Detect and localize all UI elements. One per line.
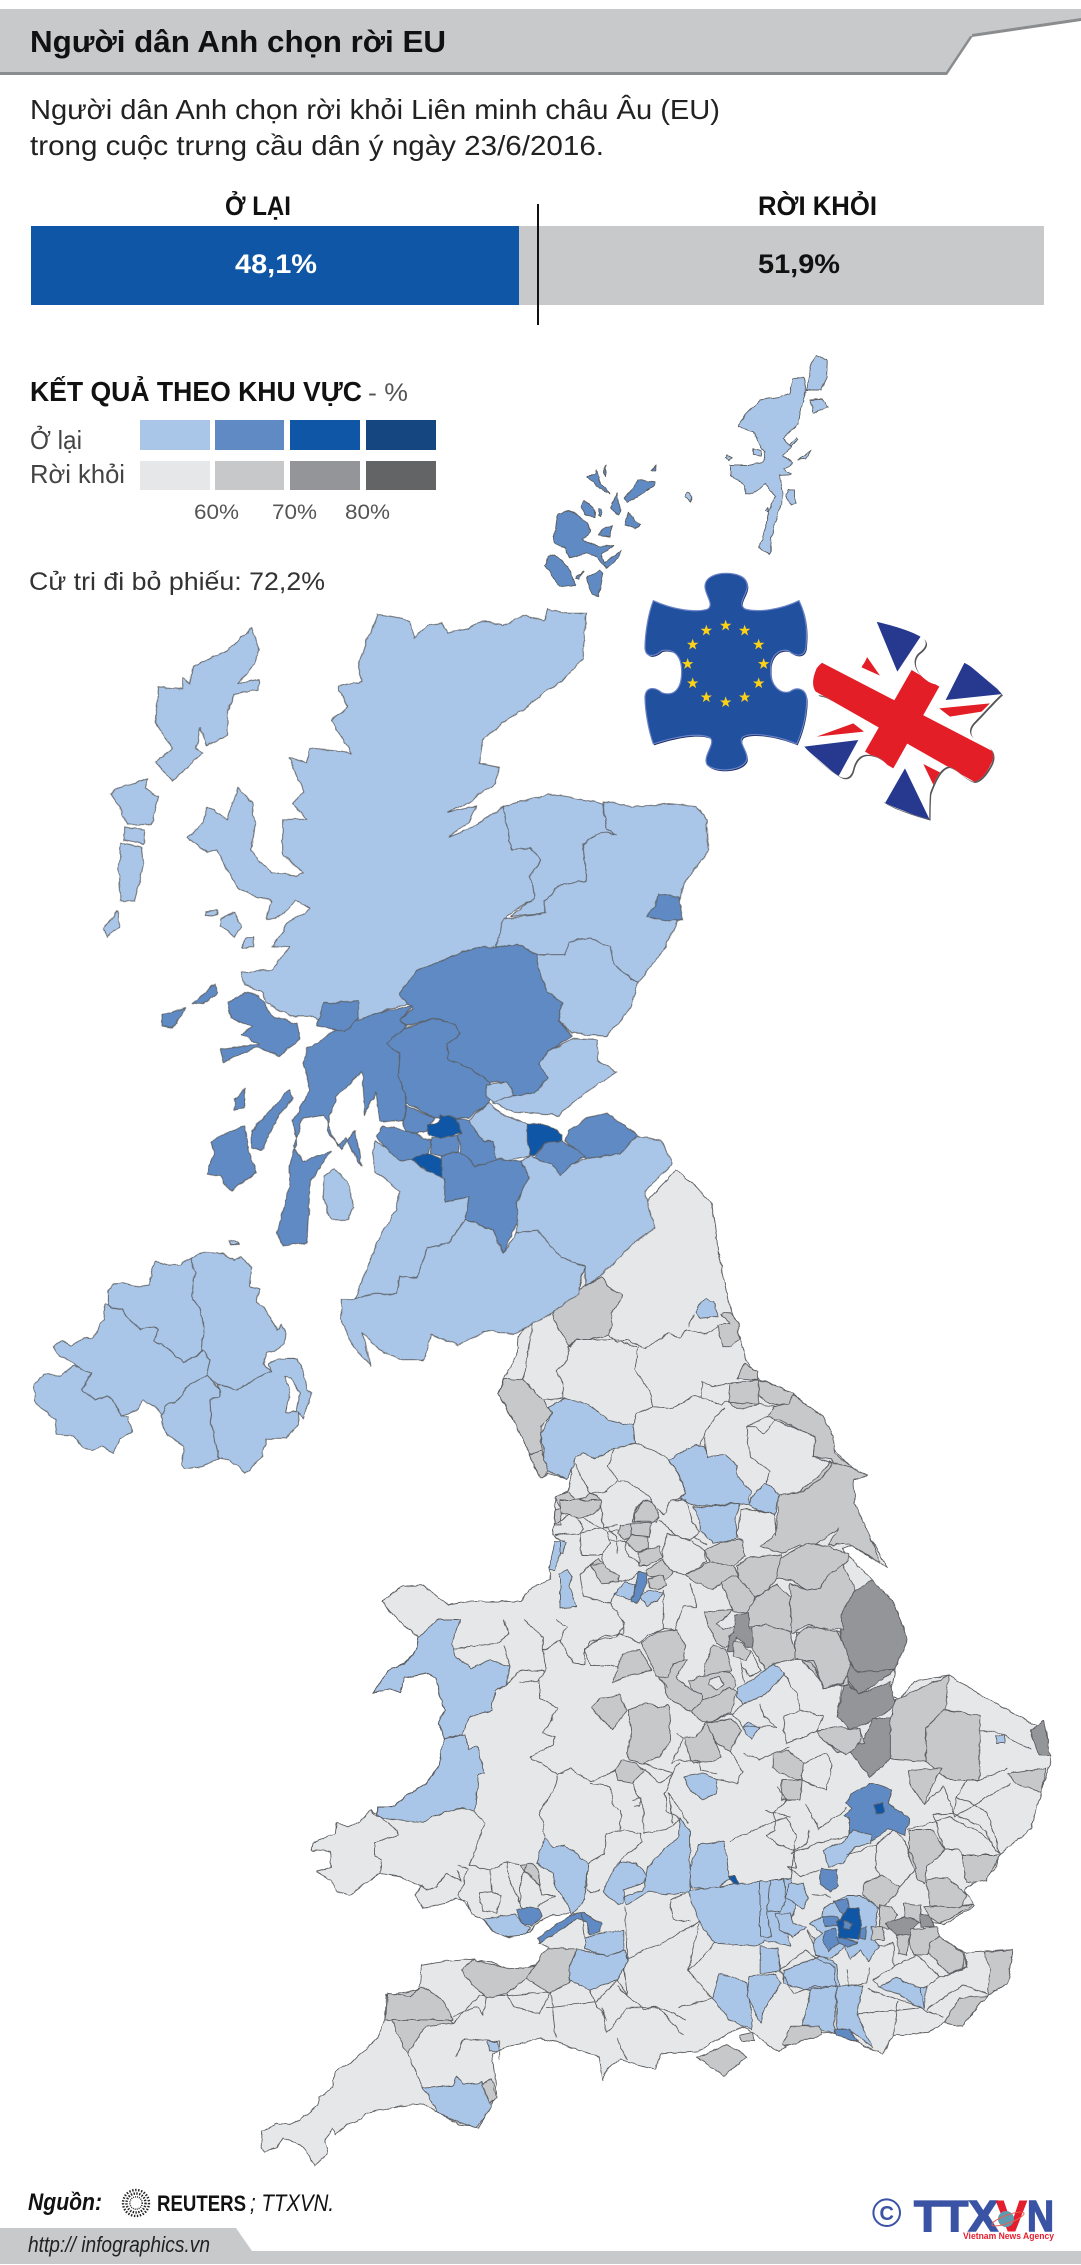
logo: TTXVN copyright: C xyxy=(879,2203,894,2225)
map: Northern England districts xyxy=(498,1277,880,1570)
result bar chart: Ở LẠI xyxy=(225,189,291,221)
result bar chart xyxy=(31,189,1044,325)
map: Northern Ireland xyxy=(34,1240,312,1473)
legend: 60% xyxy=(194,501,239,524)
title banner xyxy=(0,9,1081,75)
legend: 70% xyxy=(272,501,317,524)
source line: REUTERS xyxy=(157,2191,246,2216)
map: Scotland xyxy=(103,609,709,1365)
result bar chart: 51,9% xyxy=(758,249,840,279)
map: London and South East districts xyxy=(760,1780,1000,2017)
source line: ; TTXVN. xyxy=(250,2190,334,2217)
map: Shetland and Orkney xyxy=(545,355,828,597)
source line xyxy=(28,2189,334,2217)
map: United Kingdom results xyxy=(34,355,1050,2166)
intro text xyxy=(30,94,720,161)
intro text: Người dân Anh chọn rời khỏi Liên minh châu Âu (EU) xyxy=(30,94,720,125)
legend: Rời khỏi xyxy=(30,459,125,489)
icon: UK flag jigsaw piece xyxy=(803,620,1003,822)
legend: KẾT QUẢ THEO KHU VỰC xyxy=(30,375,362,407)
logo: TTXVN copyright: V xyxy=(996,2192,1028,2241)
logo: TTXVN copyright xyxy=(873,2192,1055,2242)
turnout text: Cử tri đi bỏ phiếu: 72,2% xyxy=(29,568,325,596)
legend xyxy=(30,375,436,524)
footer bar: http:// infographics.vn xyxy=(28,2232,210,2257)
result bar chart: RỜI KHỎI xyxy=(758,189,877,221)
legend: - % xyxy=(368,379,408,407)
map: Wales and South West districts xyxy=(372,1620,690,2020)
result bar chart: 48,1% xyxy=(235,249,317,279)
icon: EU jigsaw piece xyxy=(645,573,808,771)
title banner: Người dân Anh chọn rời EU xyxy=(30,24,446,59)
logo: TTXVN copyright: N xyxy=(1027,2192,1054,2241)
logo: TTXVN copyright: Vietnam News Agency xyxy=(963,2231,1055,2242)
source line: Nguồn: xyxy=(28,2189,102,2216)
intro text: trong cuộc trưng cầu dân ý ngày 23/6/2016. xyxy=(30,130,604,161)
legend: 80% xyxy=(345,501,390,524)
logo: TTXVN copyright: TTX xyxy=(914,2192,998,2241)
map: Midlands districts xyxy=(560,1500,860,1800)
map: England and Wales xyxy=(261,1170,1050,2166)
legend: Ở lại xyxy=(30,424,82,455)
icon: Reuters logo xyxy=(123,2190,149,2216)
footer bar xyxy=(0,2228,1081,2264)
